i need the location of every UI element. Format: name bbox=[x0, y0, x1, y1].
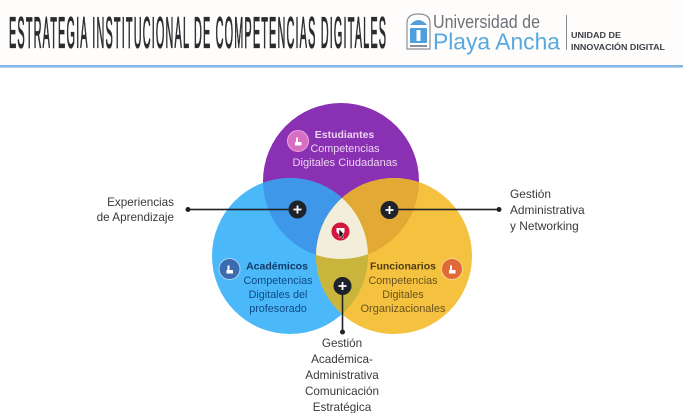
label: Gestión Administrativa y Networking: Administrativa bbox=[510, 203, 585, 217]
circle: Académicos bbox=[212, 178, 368, 334]
text: Estudiantes: Competencias bbox=[310, 143, 380, 155]
text: Funcionarios: Digitales bbox=[382, 289, 424, 301]
text: Académicos: profesorado bbox=[249, 303, 307, 315]
label: Gestión Académica-Administrativa Comunicación Estratégica: Gestión bbox=[322, 337, 362, 350]
logo: Universidad de Playa Ancha bbox=[407, 12, 665, 54]
icon: center hand bbox=[332, 222, 350, 240]
text: Funcionarios: Organizacionales bbox=[360, 303, 446, 315]
label: Gestión Académica-Administrativa Comunicación Estratégica bbox=[305, 337, 379, 413]
circle: Funcionarios bbox=[316, 178, 472, 334]
circle: Estudiantes bbox=[263, 103, 419, 259]
unit name bbox=[571, 30, 665, 52]
icon: Funcionarios hand bbox=[442, 258, 462, 280]
connector: Experiencias de Aprendizaje bbox=[186, 207, 293, 212]
text: Funcionarios: Competencias bbox=[368, 275, 438, 287]
text: Estudiantes: Digitales Ciudadanas bbox=[292, 157, 398, 169]
label: Experiencias de Aprendizaje: de Aprendizaje bbox=[97, 211, 174, 224]
connector: Gestión Administrativa bbox=[392, 207, 502, 212]
plus button: right bbox=[380, 201, 398, 219]
text: Estudiantes: Estudiantes bbox=[315, 129, 374, 141]
overlap: Funcionarios and Estudiantes bbox=[316, 178, 419, 254]
unit name: INNOVACIÓN DIGITAL bbox=[571, 41, 665, 52]
logo text: Universidad de: Universidad de bbox=[433, 12, 540, 32]
icon: Académicos hand bbox=[219, 258, 240, 280]
title: ESTRATEGIA INSTITUCIONAL DE COMPETENCIAS DIGITALES bbox=[9, 8, 386, 57]
label: Gestión Académica-Administrativa Comunicación Estratégica: Comunicación bbox=[305, 385, 379, 398]
text: Funcionarios: Funcionarios bbox=[370, 260, 436, 272]
connector: Gestión Académica bbox=[340, 286, 345, 334]
label: Gestión Académica-Administrativa Comunicación Estratégica: Académica- bbox=[311, 353, 373, 366]
icon: university shield bbox=[407, 14, 430, 49]
logo text: Playa Ancha: Playa Ancha bbox=[433, 28, 560, 54]
text: Académicos: Competencias bbox=[243, 275, 313, 287]
label: Gestión Administrativa y Networking bbox=[510, 187, 585, 233]
icon: Estudiantes hand bbox=[288, 130, 308, 152]
overlap: Académicos and Estudiantes bbox=[263, 178, 342, 255]
label: Gestión Administrativa y Networking: Gestión bbox=[510, 187, 551, 201]
text: Académicos bbox=[243, 260, 313, 315]
text: Estudiantes bbox=[292, 129, 398, 169]
label: Experiencias de Aprendizaje bbox=[97, 196, 174, 224]
text: Académicos: Académicos bbox=[246, 260, 308, 272]
venn diagram bbox=[212, 103, 472, 334]
header rule bbox=[0, 65, 683, 68]
label: Experiencias de Aprendizaje: Experiencias bbox=[107, 196, 174, 209]
label: Gestión Académica-Administrativa Comunicación Estratégica: Administrativa bbox=[305, 369, 379, 382]
overlap: center bbox=[316, 198, 368, 259]
label: Gestión Administrativa y Networking: y Networking bbox=[510, 219, 579, 233]
text: Funcionarios bbox=[360, 260, 446, 315]
overlap: Académicos and Funcionarios bbox=[316, 198, 368, 314]
logo divider bbox=[566, 15, 567, 50]
text: Académicos: Digitales del bbox=[249, 289, 307, 301]
plus button: bottom bbox=[334, 277, 352, 295]
unit name: UNIDAD DE bbox=[571, 30, 621, 40]
plus button: left bbox=[288, 200, 306, 218]
